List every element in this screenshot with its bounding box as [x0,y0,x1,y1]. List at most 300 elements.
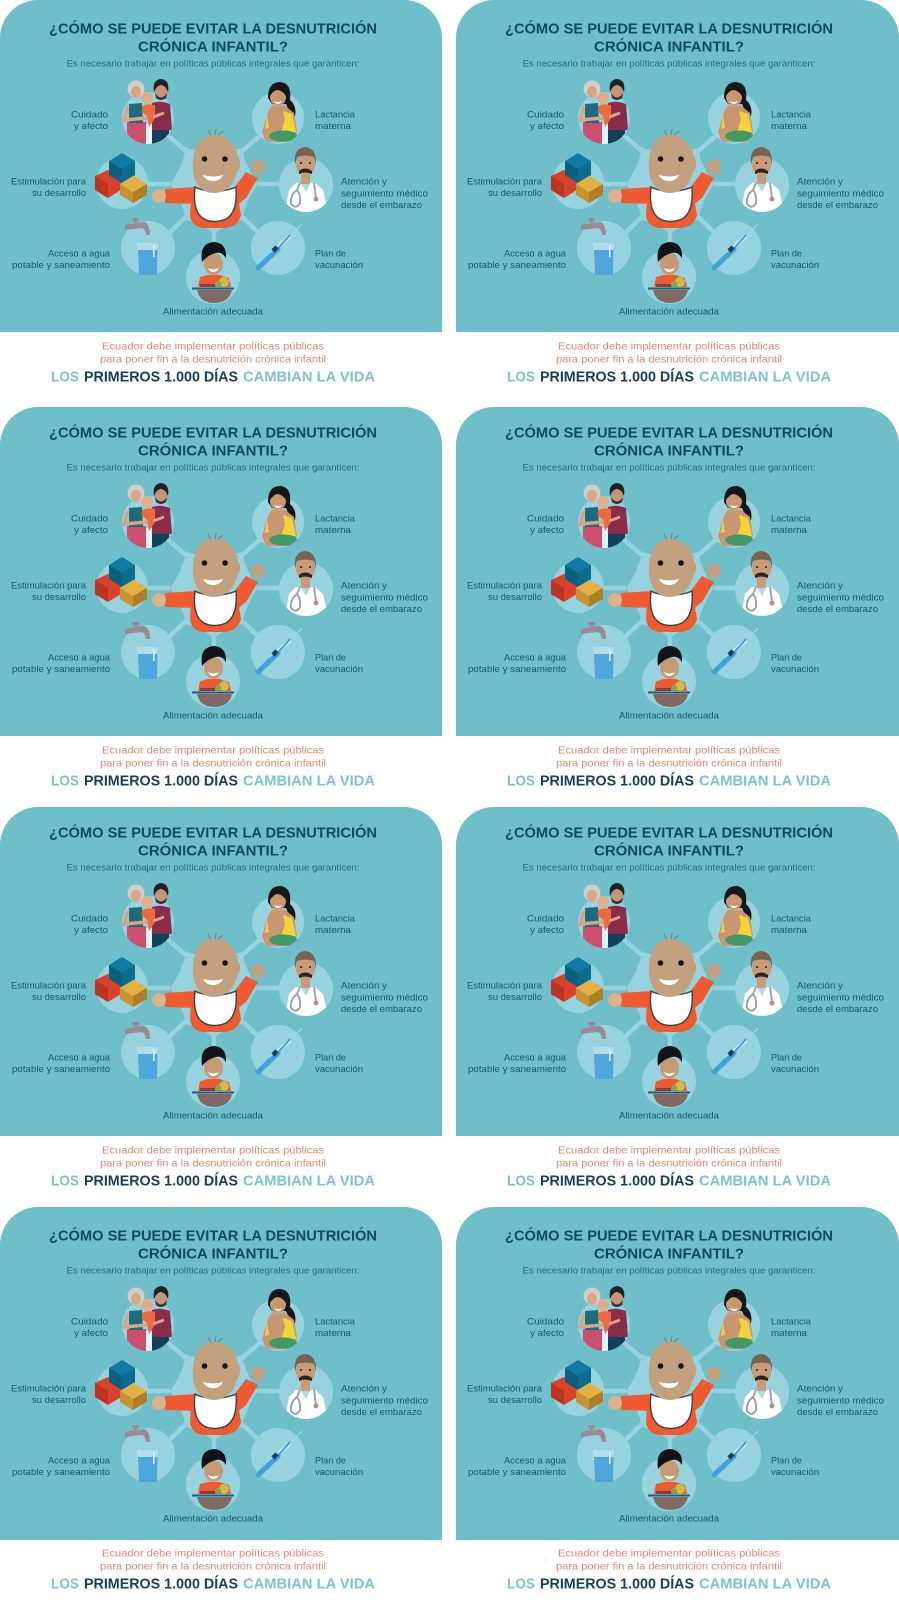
label: agua: Acceso a agua [504,653,567,664]
label: agua: Acceso a agua [48,653,111,664]
icon: child with food [648,242,690,303]
label: lactancia materna: materna [315,121,352,132]
label: lactancia materna: Lactancia [771,110,812,121]
label: lactancia materna: Lactancia [315,110,356,121]
label: agua: potable y saneamiento [12,1467,110,1478]
slogan [507,1575,831,1592]
icon: blocks [95,153,147,203]
label: vacunación [771,249,819,271]
slogan: PRIMEROS 1.000 DÍAS [84,1172,238,1189]
label: atención médica: seguimiento médico [797,592,884,604]
label: vacunación: vacunación [315,1467,363,1478]
label: cuidado y afecto: y afecto [530,925,564,936]
icon: doctor [742,147,783,213]
icon: mother [718,886,753,946]
orange message: Ecuador debe implementar políticas públicas [102,744,324,756]
icon: family [580,1286,628,1353]
orange message: Ecuador debe implementar políticas públicas [102,340,324,352]
icon: water tap and glass [125,1425,158,1482]
hub connectors [96,1299,333,1511]
slogan: CAMBIAN LA VIDA [243,368,375,385]
slogan [507,772,831,789]
title: ¿CÓMO SE PUEDE EVITAR LA DESNUTRICIÓN [505,20,833,38]
label: atención médica: seguimiento médico [797,992,884,1004]
icon: water tap and glass [125,622,158,679]
label: vacunación [315,653,363,675]
label: agua: potable y saneamiento [468,1064,566,1075]
label: atención médica: Atención y [797,580,843,591]
title: CRÓNICA INFANTIL? [594,1244,744,1262]
label: lactancia materna: Lactancia [771,914,812,925]
icon: doctor [286,951,327,1017]
icon: water tap and glass [125,218,158,275]
label: lactancia materna: Lactancia [771,1317,812,1328]
orange message: para poner fin a la desnutrición crónica infantil [556,1157,782,1169]
icon: baby [152,933,265,1032]
label: cuidado y afecto [71,514,108,536]
panel group: row 3 left [0,807,442,1189]
label: agua: Acceso a agua [504,1053,567,1064]
label: agua: Acceso a agua [504,249,567,260]
label: lactancia materna: materna [771,1328,808,1339]
label: cuidado y afecto: y afecto [74,1328,108,1339]
icon: child with food [192,1449,234,1510]
icon: blocks [551,153,603,203]
label: atención médica [797,580,884,615]
label: vacunación [315,1053,363,1075]
icon: baby [152,129,265,228]
title: ¿CÓMO SE PUEDE EVITAR LA DESNUTRICIÓN [49,20,377,38]
label: cuidado y afecto [527,1317,564,1339]
label: vacunación: Plan de [315,1053,346,1064]
subtitle: Es necesario trabajar en políticas públicas integrales que garanticen: [66,463,360,474]
icon: syringe [714,224,758,268]
label: agua: Acceso a agua [48,1053,111,1064]
subtitle: Es necesario trabajar en políticas públicas integrales que garanticen: [522,59,816,70]
label: atención médica: desde el embarazo [341,1407,422,1418]
icon: syringe [714,1028,758,1072]
slogan: LOS [51,368,79,385]
icon: syringe [258,1028,302,1072]
label: estimulación [11,980,87,1003]
icon: family [124,483,172,550]
label: atención médica: Atención y [341,176,387,187]
slogan: LOS [507,1575,535,1592]
panel background [456,407,899,736]
icon: child with food [192,1046,234,1107]
slogan [51,1575,375,1592]
title [49,20,377,56]
icon: syringe [258,1431,302,1475]
label: lactancia materna: Lactancia [315,514,356,525]
label: atención médica: desde el embarazo [341,200,422,211]
label: atención médica: desde el embarazo [797,200,878,211]
label: estimulación [467,176,543,199]
slogan [51,772,375,789]
panel group: row 2 left [0,407,442,789]
panel background [456,0,899,332]
slogan: PRIMEROS 1.000 DÍAS [540,1172,694,1189]
orange message: para poner fin a la desnutrición crónica infantil [100,757,326,769]
slogan [51,1172,375,1189]
label: lactancia materna [315,110,356,132]
subtitle: Es necesario trabajar en políticas públicas integrales que garanticen: [66,59,360,70]
panel group: row 1 right [456,0,899,385]
icon: family [124,883,172,950]
title: ¿CÓMO SE PUEDE EVITAR LA DESNUTRICIÓN [49,1226,377,1244]
hub connectors [96,896,333,1108]
title [49,824,377,860]
label: agua: Acceso a agua [504,1456,567,1467]
label: lactancia materna [315,914,356,936]
label: cuidado y afecto: y afecto [74,121,108,132]
label: alimentación: Alimentación adecuada [619,306,720,317]
label: atención médica: Atención y [797,980,843,991]
icon: baby [152,1336,265,1435]
label: atención médica [341,580,428,615]
label: alimentación: Alimentación adecuada [163,306,264,317]
label: vacunación: Plan de [315,249,346,260]
icon: water tap and glass [581,622,614,679]
label: cuidado y afecto: Cuidado [71,1317,108,1328]
icon: water tap and glass [581,1022,614,1079]
orange message: para poner fin a la desnutrición crónica infantil [100,353,326,365]
icon: mother [262,486,297,546]
panel group: row 4 left [0,1207,442,1592]
label: alimentación: Alimentación adecuada [619,710,720,721]
label: alimentación: Alimentación adecuada [163,1110,264,1121]
icon: child with food [648,1449,690,1510]
label: atención médica: Atención y [341,580,387,591]
title: CRÓNICA INFANTIL? [594,442,744,460]
label: vacunación [771,653,819,675]
icon: water tap and glass [581,218,614,275]
label: estimulación: su desarrollo [32,1395,86,1406]
label: atención médica: Atención y [341,980,387,991]
title: CRÓNICA INFANTIL? [138,842,288,860]
subtitle: Es necesario trabajar en políticas públicas integrales que garanticen: [522,463,816,474]
title: CRÓNICA INFANTIL? [138,442,288,460]
label: vacunación [771,1456,819,1478]
icon: doctor [286,147,327,213]
slogan: LOS [51,772,79,789]
label: estimulación: Estimulación para [467,176,543,187]
label: alimentación: Alimentación adecuada [619,1110,720,1121]
label: estimulación [11,580,87,603]
label: agua [12,653,111,675]
icon: mother [262,82,297,142]
label: estimulación: Estimulación para [11,580,87,591]
icon: family [580,883,628,950]
label: lactancia materna: materna [771,925,808,936]
label: atención médica: desde el embarazo [797,1407,878,1418]
icon: doctor [286,551,327,617]
label: estimulación: Estimulación para [11,176,87,187]
label: estimulación: Estimulación para [467,1383,543,1394]
label: cuidado y afecto: Cuidado [71,914,108,925]
icon: child with food [648,1046,690,1107]
label: atención médica [797,176,884,211]
label: estimulación: Estimulación para [467,980,543,991]
panel background [456,1207,899,1540]
slogan: LOS [51,1172,79,1189]
slogan: LOS [507,772,535,789]
orange message: para poner fin a la desnutrición crónica infantil [556,353,782,365]
label: vacunación: vacunación [315,260,363,271]
label: atención médica: seguimiento médico [797,188,884,200]
slogan [51,368,375,385]
icon: doctor [742,951,783,1017]
icon: syringe [258,224,302,268]
label: estimulación [11,1383,87,1406]
label: atención médica [797,980,884,1015]
label: estimulación: Estimulación para [11,1383,87,1394]
orange message: para poner fin a la desnutrición crónica infantil [556,1560,782,1572]
icon: doctor [742,1354,783,1420]
label: atención médica: seguimiento médico [341,992,428,1004]
orange message: Ecuador debe implementar políticas públicas [102,1144,324,1156]
orange message [100,744,326,769]
orange message: Ecuador debe implementar políticas públicas [558,340,780,352]
icon: syringe [714,1431,758,1475]
orange message: Ecuador debe implementar políticas públicas [558,1547,780,1559]
label: atención médica [341,1383,428,1418]
hub connectors [552,1299,789,1511]
label: lactancia materna [771,914,812,936]
icon: child with food [192,242,234,303]
icon: family [580,483,628,550]
slogan: LOS [51,1575,79,1592]
icon: blocks [95,1360,147,1410]
label: lactancia materna: materna [315,925,352,936]
label: atención médica [797,1383,884,1418]
orange message [556,1144,782,1169]
label: lactancia materna [315,514,356,536]
icon: mother [718,1289,753,1349]
icon: baby [608,933,721,1032]
label: atención médica: desde el embarazo [341,1004,422,1015]
label: atención médica: desde el embarazo [797,604,878,615]
icon: baby [152,533,265,632]
title [505,20,833,56]
title: CRÓNICA INFANTIL? [594,842,744,860]
label: estimulación: su desarrollo [32,188,86,199]
label: cuidado y afecto: Cuidado [71,110,108,121]
label: atención médica: Atención y [797,1383,843,1394]
label: estimulación: su desarrollo [488,592,542,603]
slogan: LOS [507,368,535,385]
orange message: para poner fin a la desnutrición crónica infantil [100,1560,326,1572]
label: vacunación: Plan de [771,653,802,664]
icon: baby [608,1336,721,1435]
panel background [0,807,442,1136]
label: atención médica [341,980,428,1015]
label: cuidado y afecto: Cuidado [527,514,564,525]
slogan [507,1172,831,1189]
slogan: PRIMEROS 1.000 DÍAS [84,772,238,789]
label: agua: potable y saneamiento [468,664,566,675]
orange message [556,1547,782,1572]
label: alimentación: Alimentación adecuada [163,710,264,721]
title [505,824,833,860]
slogan: PRIMEROS 1.000 DÍAS [84,1575,238,1592]
label: agua: Acceso a agua [48,249,111,260]
label: cuidado y afecto: y afecto [74,525,108,536]
label: agua [12,249,111,271]
label: atención médica [341,176,428,211]
label: cuidado y afecto [71,110,108,132]
icon: syringe [258,628,302,672]
title: ¿CÓMO SE PUEDE EVITAR LA DESNUTRICIÓN [49,424,377,442]
label: agua: potable y saneamiento [12,664,110,675]
label: lactancia materna: materna [315,525,352,536]
slogan: PRIMEROS 1.000 DÍAS [540,368,694,385]
icon: blocks [551,557,603,607]
label: estimulación: su desarrollo [32,992,86,1003]
label: atención médica: seguimiento médico [341,188,428,200]
label: cuidado y afecto [71,1317,108,1339]
label: atención médica: Atención y [341,1383,387,1394]
label: vacunación: vacunación [771,260,819,271]
label: estimulación: Estimulación para [467,580,543,591]
icon: blocks [95,957,147,1007]
label: atención médica: desde el embarazo [341,604,422,615]
slogan: PRIMEROS 1.000 DÍAS [540,772,694,789]
slogan: PRIMEROS 1.000 DÍAS [84,368,238,385]
icon: baby [608,129,721,228]
label: cuidado y afecto: y afecto [530,1328,564,1339]
panel background [0,1207,442,1540]
slogan: LOS [507,1172,535,1189]
label: cuidado y afecto [527,514,564,536]
label: agua [12,1053,111,1075]
label: vacunación: Plan de [315,653,346,664]
icon: mother [718,82,753,142]
label: cuidado y afecto: y afecto [74,925,108,936]
label: lactancia materna: Lactancia [771,514,812,525]
label: cuidado y afecto [527,914,564,936]
icon: child with food [192,646,234,707]
label: estimulación [467,580,543,603]
label: estimulación: su desarrollo [488,188,542,199]
slogan: CAMBIAN LA VIDA [243,1575,375,1592]
orange message: Ecuador debe implementar políticas públicas [558,1144,780,1156]
label: lactancia materna: materna [771,525,808,536]
slogan: CAMBIAN LA VIDA [243,1172,375,1189]
subtitle: Es necesario trabajar en políticas públicas integrales que garanticen: [522,863,816,874]
hub connectors [96,496,333,708]
orange message [556,744,782,769]
orange message [100,1144,326,1169]
title [49,1226,377,1262]
label: vacunación: vacunación [315,664,363,675]
icon: blocks [551,957,603,1007]
label: estimulación [467,980,543,1003]
label: vacunación [315,249,363,271]
label: atención médica: seguimiento médico [341,592,428,604]
icon: doctor [742,551,783,617]
label: vacunación: Plan de [771,1053,802,1064]
label: cuidado y afecto: Cuidado [527,914,564,925]
label: lactancia materna: materna [771,121,808,132]
icon: baby [608,533,721,632]
label: vacunación [315,1456,363,1478]
panel group: row 1 left [0,0,442,385]
slogan: CAMBIAN LA VIDA [699,1575,831,1592]
title: ¿CÓMO SE PUEDE EVITAR LA DESNUTRICIÓN [505,824,833,842]
label: cuidado y afecto: y afecto [530,525,564,536]
label: cuidado y afecto: Cuidado [71,514,108,525]
label: cuidado y afecto [71,914,108,936]
icon: mother [262,886,297,946]
icon: family [124,79,172,146]
title: CRÓNICA INFANTIL? [594,38,744,56]
label: vacunación: vacunación [771,1064,819,1075]
label: vacunación: vacunación [315,1064,363,1075]
icon: water tap and glass [125,1022,158,1079]
panel group: row 3 right [456,807,899,1189]
slogan: CAMBIAN LA VIDA [699,1172,831,1189]
icon: doctor [286,1354,327,1420]
label: lactancia materna [315,1317,356,1339]
panel background [456,807,899,1136]
label: estimulación [467,1383,543,1406]
label: cuidado y afecto: y afecto [530,121,564,132]
label: vacunación: vacunación [771,1467,819,1478]
label: agua [468,249,567,271]
label: vacunación: vacunación [771,664,819,675]
label: agua [468,1053,567,1075]
title [49,424,377,460]
icon: syringe [714,628,758,672]
label: cuidado y afecto: Cuidado [527,1317,564,1328]
label: estimulación: su desarrollo [488,992,542,1003]
orange message: para poner fin a la desnutrición crónica infantil [556,757,782,769]
slogan: CAMBIAN LA VIDA [699,772,831,789]
label: lactancia materna [771,110,812,132]
hub connectors [96,92,333,304]
icon: blocks [95,557,147,607]
icon: mother [262,1289,297,1349]
label: agua: Acceso a agua [48,1456,111,1467]
slogan: PRIMEROS 1.000 DÍAS [540,1575,694,1592]
panel background [0,0,442,332]
subtitle: Es necesario trabajar en políticas públicas integrales que garanticen: [522,1266,816,1277]
icon: family [580,79,628,146]
label: estimulación: Estimulación para [11,980,87,991]
label: vacunación [771,1053,819,1075]
slogan [507,368,831,385]
label: estimulación: su desarrollo [488,1395,542,1406]
hub connectors [552,896,789,1108]
label: estimulación [11,176,87,199]
title: ¿CÓMO SE PUEDE EVITAR LA DESNUTRICIÓN [505,424,833,442]
label: lactancia materna: Lactancia [315,1317,356,1328]
label: agua [468,653,567,675]
title: ¿CÓMO SE PUEDE EVITAR LA DESNUTRICIÓN [505,1226,833,1244]
label: atención médica: desde el embarazo [797,1004,878,1015]
title: CRÓNICA INFANTIL? [138,38,288,56]
title [505,1226,833,1262]
label: vacunación: Plan de [315,1456,346,1467]
label: lactancia materna: materna [315,1328,352,1339]
label: cuidado y afecto [527,110,564,132]
subtitle: Es necesario trabajar en políticas públicas integrales que garanticen: [66,863,360,874]
hub connectors [552,92,789,304]
label: vacunación: Plan de [771,249,802,260]
orange message: Ecuador debe implementar políticas públicas [102,1547,324,1559]
label: lactancia materna: Lactancia [315,914,356,925]
